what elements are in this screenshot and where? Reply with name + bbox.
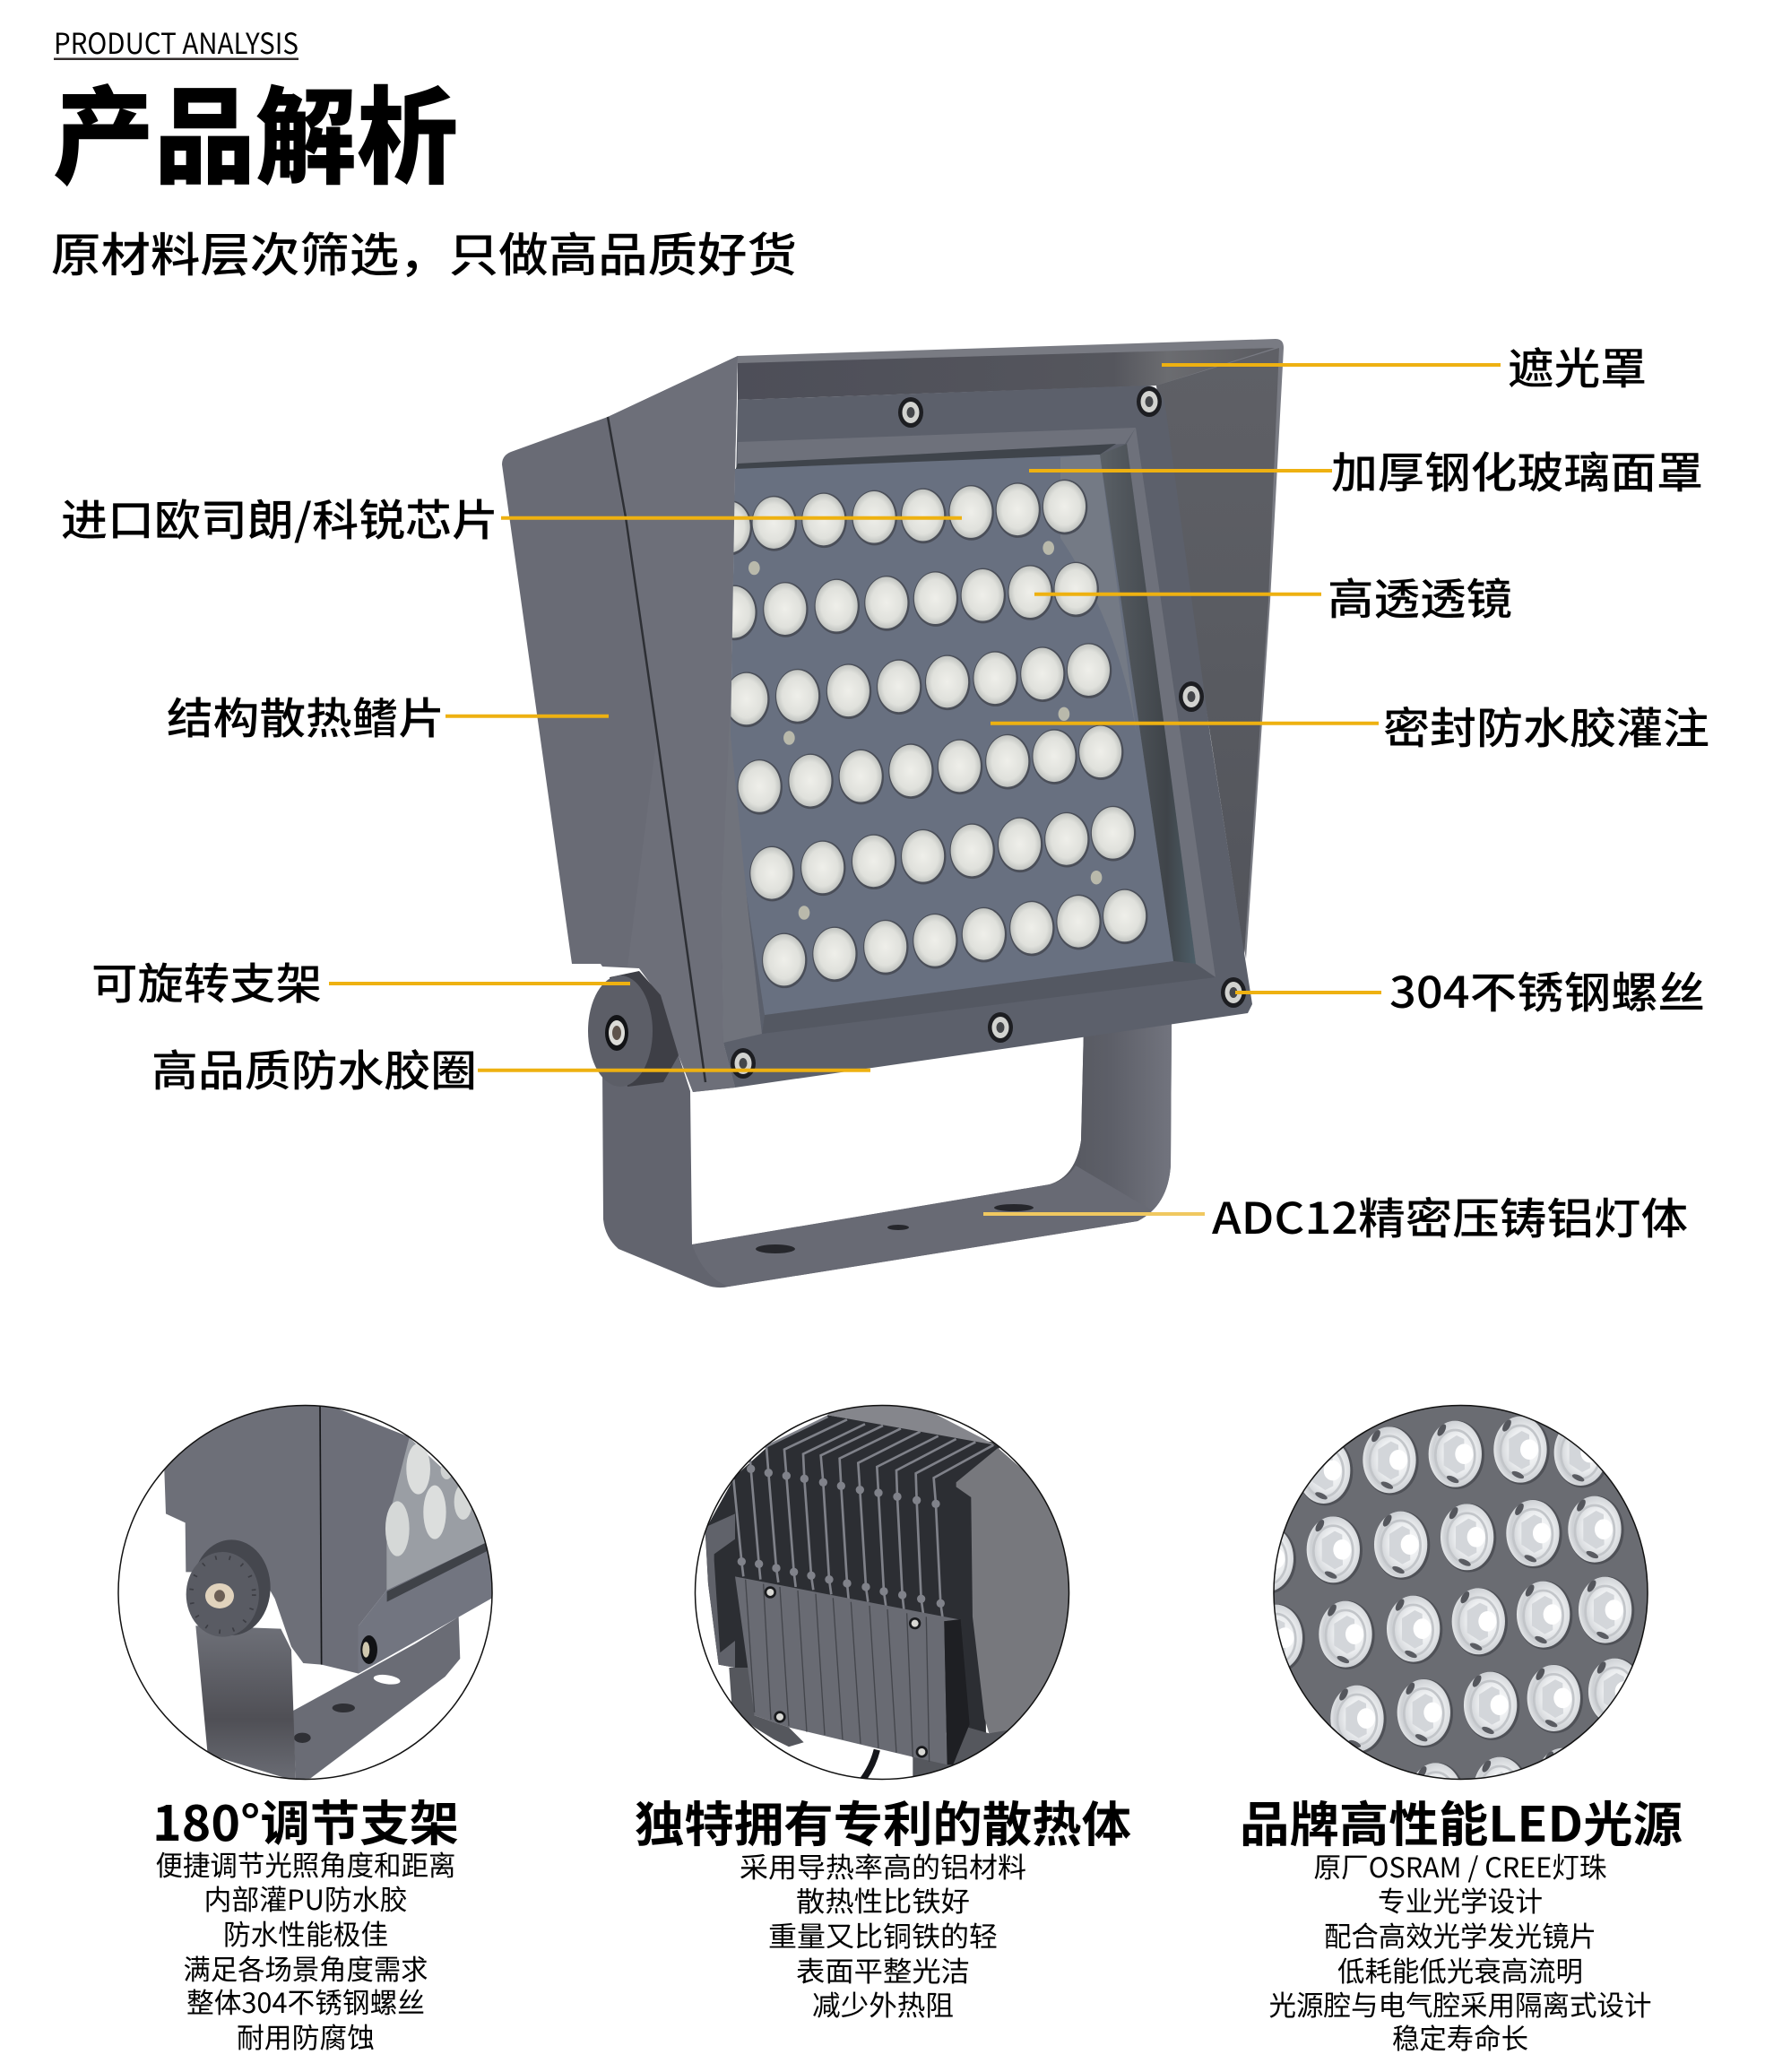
body text: 表面平整光洁 — [796, 1949, 970, 1990]
heading: 180°调节支架 — [152, 1784, 459, 1855]
callout: fins: 结构散热鳍片 — [167, 683, 445, 746]
circle outline — [696, 1406, 1069, 1779]
body text — [1269, 1845, 1651, 2057]
bracket — [602, 1022, 1172, 1287]
body text: 重量又比铜铁的轻 — [768, 1914, 998, 1955]
body text — [156, 1843, 455, 2056]
callout: hood: 遮光罩 — [1508, 334, 1647, 396]
body text: 防水性能极佳 — [223, 1912, 388, 1953]
callout: rotating bracket: 可旋转支架 — [91, 949, 322, 1011]
panel: adjustable bracket detail — [118, 1401, 496, 2056]
frame — [722, 386, 1252, 1088]
hood — [738, 339, 1284, 959]
heading: 品牌高性能LED光源 — [1240, 1785, 1683, 1856]
body text: 耐用防腐蚀 — [237, 2016, 375, 2056]
circle outline — [118, 1406, 492, 1779]
callout: stainless screws: 304不锈钢螺丝 — [1389, 958, 1705, 1020]
circle outline — [1274, 1406, 1648, 1779]
callout: LED chip: 进口欧司朗/科锐芯片 — [61, 485, 498, 548]
photo: LED lenses close-up — [1275, 1406, 1648, 1779]
title: 产品解析 — [53, 52, 458, 205]
body text: 低耗能低光衰高流明 — [1337, 1949, 1583, 1990]
LED panel — [707, 455, 1173, 1015]
body text: 原厂OSRAM / CREE灯珠 — [1314, 1845, 1606, 1886]
body text: 稳定寿命长 — [1392, 2016, 1528, 2057]
body text: 内部灌PU防水胶 — [204, 1877, 407, 1918]
body text: 满足各场景角度需求 — [183, 1947, 428, 1988]
body text: 减少外热阻 — [812, 1983, 954, 2024]
product image: floodlight — [502, 339, 1284, 1287]
panel: LED source detail — [1240, 1405, 1683, 2057]
heading: 独特拥有专利的散热体 — [635, 1785, 1131, 1856]
callout: waterproof sealant: 密封防水胶灌注 — [1383, 693, 1709, 756]
body text — [740, 1845, 1026, 2024]
body text: 便捷调节光照角度和距离 — [156, 1843, 455, 1884]
pivot knob — [588, 971, 679, 1087]
body text: 采用导热率高的铝材料 — [740, 1845, 1026, 1886]
callout: tempered glass: 加厚钢化玻璃面罩 — [1331, 438, 1703, 500]
body text: 光源腔与电气腔采用隔离式设计 — [1269, 1983, 1651, 2024]
side housing — [502, 356, 738, 1092]
callout: gasket: 高品质防水胶圈 — [151, 1036, 477, 1098]
panel: heat sink detail — [635, 1405, 1131, 2024]
body text: 配合高效光学发光镜片 — [1324, 1914, 1596, 1955]
body text: 专业光学设计 — [1378, 1879, 1543, 1920]
body text: 整体304不锈钢螺丝 — [186, 1981, 425, 2021]
frame screws — [731, 386, 1246, 1079]
photo: bracket close-up — [164, 1401, 496, 1782]
photo: heat sink close-up — [705, 1405, 1078, 1782]
body text: 散热性比铁好 — [796, 1879, 970, 1920]
eyebrow: product analysis: PRODUCT ANALYSIS — [54, 22, 298, 63]
subtitle: 原材料层次筛选，只做高品质好货 — [51, 218, 797, 285]
callout: lens: 高透透镜 — [1328, 564, 1512, 627]
callout: ADC12 body: ADC12精密压铸铝灯体 — [1212, 1183, 1688, 1246]
